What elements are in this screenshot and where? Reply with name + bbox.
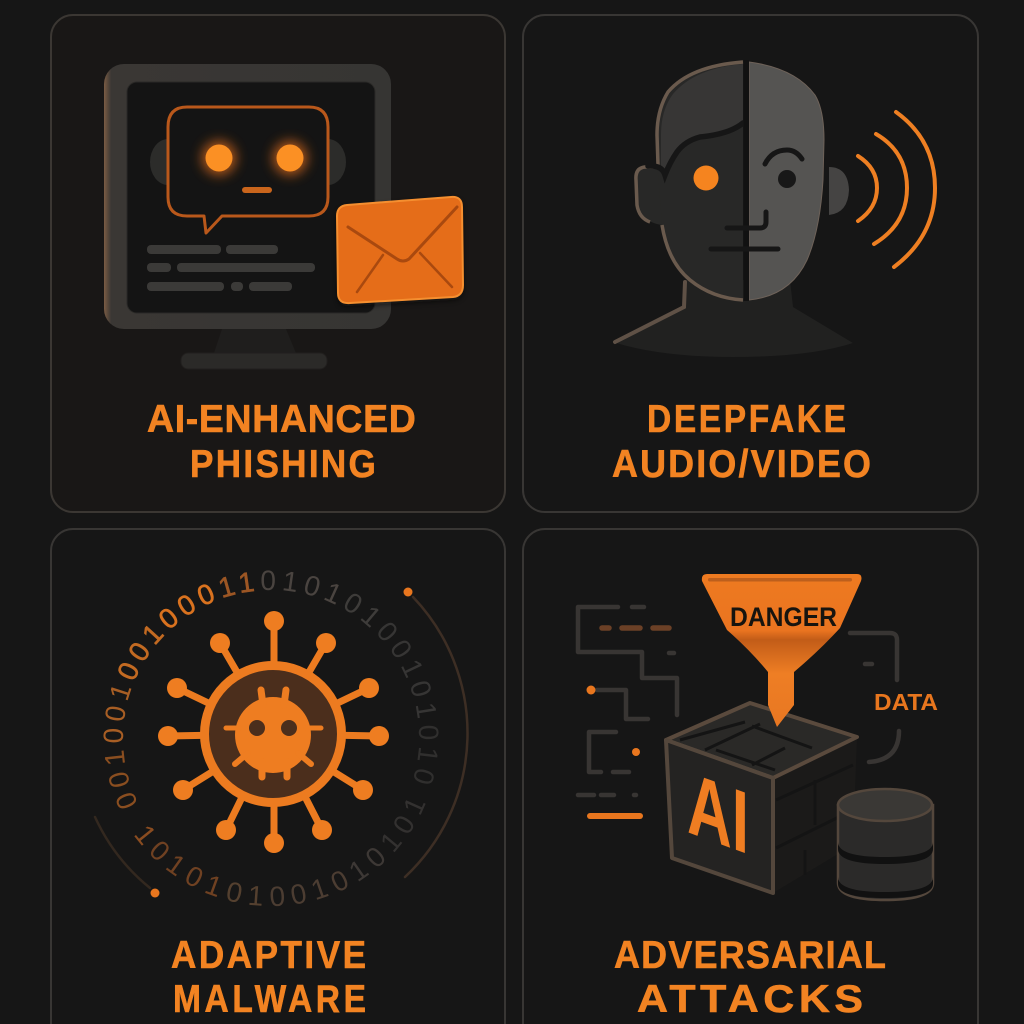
heading: AI-enhanced phishing: PHISHING (190, 441, 376, 485)
eyebrow (765, 150, 802, 164)
heading: AI-enhanced phishing: AI-ENHANCED (147, 397, 416, 441)
heading: adaptive malware (171, 932, 366, 1021)
envelope (337, 197, 463, 306)
orange circuit accents (586, 686, 643, 819)
virus spikes (158, 611, 389, 853)
DANGER label: DANGER (730, 602, 837, 632)
panel: adversarial attacks (523, 529, 978, 1024)
robot speech bubble (168, 107, 328, 233)
hair (661, 64, 743, 175)
robot eyes (202, 141, 307, 175)
cube left face (666, 740, 773, 893)
cube bricks (680, 722, 853, 875)
icon: data poisoning funnel (578, 574, 938, 900)
monitor screen (127, 82, 375, 313)
left half of face (657, 62, 743, 300)
centre divider (744, 60, 749, 301)
heading: deepfake audio/video: DEEPFAKE (647, 397, 846, 441)
cube top (666, 703, 857, 778)
hair line (648, 123, 743, 175)
icon: split face (613, 60, 935, 357)
icon: monitor with robot and envelope (104, 64, 463, 369)
DATA label: DATA (874, 689, 938, 715)
heading: adaptive malware: MALWARE (173, 977, 366, 1021)
monitor frame (104, 64, 391, 329)
outer arcs (95, 597, 468, 888)
orange eye (694, 166, 718, 190)
email text lines (147, 245, 315, 291)
binary ring bottom: 1010101001010101 (134, 800, 426, 906)
funnel (702, 574, 862, 727)
shoulder highlight (615, 282, 685, 342)
heading: adaptive malware: ADAPTIVE (171, 932, 366, 976)
sound waves (858, 112, 935, 267)
arc end dots (150, 588, 412, 898)
panel: adaptive malware (50, 528, 506, 1024)
icon: binary ring and virus (94, 570, 469, 906)
heading: adversarial attacks: ATTACKS (637, 977, 863, 1021)
virus inner body (226, 690, 321, 777)
panel: deepfake audio/video (523, 15, 978, 512)
AI cube label: AI (687, 754, 749, 874)
nose (727, 212, 766, 228)
neck and shoulders (613, 280, 853, 357)
heading: deepfake audio/video (612, 397, 871, 485)
funnel rim (708, 578, 852, 582)
heading: adversarial attacks (614, 933, 886, 1021)
panel: AI-enhanced phishing (51, 15, 505, 512)
database (838, 789, 933, 900)
virus ring (204, 666, 342, 802)
mouth (711, 246, 778, 252)
heading: adversarial attacks: ADVERSARIAL (614, 933, 886, 976)
cube (666, 703, 857, 893)
circuit lines (578, 607, 899, 795)
brown dashes (602, 625, 669, 631)
right half of face (749, 62, 824, 300)
dark eye (778, 170, 796, 188)
robot ears (150, 139, 346, 185)
heading: deepfake audio/video: AUDIO/VIDEO (612, 442, 871, 485)
robot mouth (242, 187, 272, 193)
heading: AI-enhanced phishing (147, 397, 416, 485)
monitor stand (181, 329, 327, 369)
left ear (636, 167, 668, 226)
right ear (829, 167, 849, 215)
